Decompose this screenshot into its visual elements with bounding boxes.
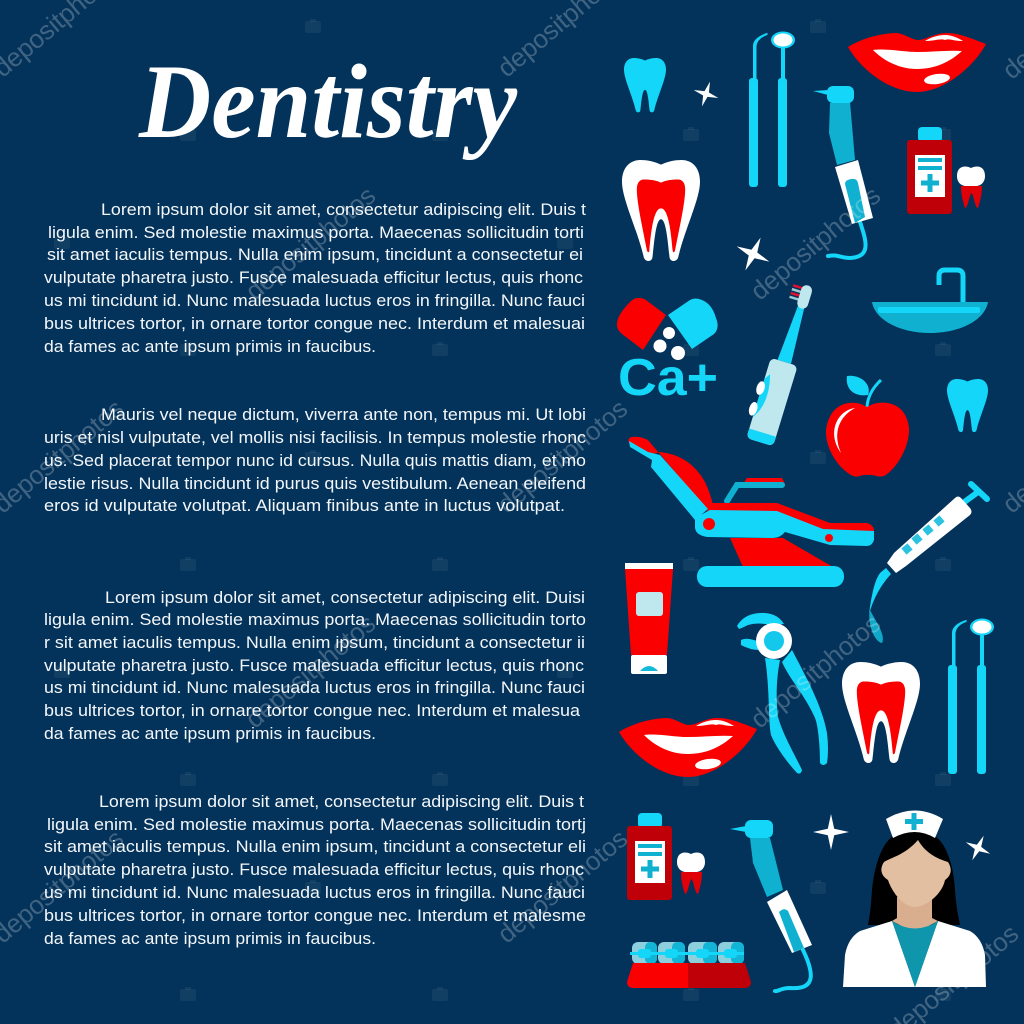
text block: paragraph 2: lestie risus. Nulla tincidunt id purus quis vestibulum. Aenean eleifend [44,474,586,493]
text block: paragraph 1: da fames ac ante ipsum primis in faucibus. [44,337,376,356]
text block: paragraph 3: Lorem ipsum dolor sit amet, consectetur adipiscing elit. Duisi [105,588,585,607]
icon: extraction forceps [737,613,828,774]
text block: paragraph 1: bus ultrices tortor, in ornare tortor congue nec. Interdum et malesuai [44,314,585,333]
icon: sparkle 1 [690,78,722,110]
watermark text: depositphotos [239,608,381,734]
icon: red lips top [848,33,986,92]
icon: large tooth with pulp top [622,160,700,261]
icon: calcium capsule [617,298,718,360]
text block: paragraph 1: vulputate pharetra justo. Fusce malesuada efficitur lectus, quis rhonc [44,268,584,287]
icon: small cyan tooth right [947,379,988,432]
icon: mouthwash bottle with tooth top [907,127,985,214]
text block: paragraph 3: bus ultrices tortor, in ornare tortor congue nec. Interdum et malesua [44,701,581,720]
watermark text: depositphotos [491,393,633,519]
text block: paragraph 4 [44,792,586,948]
text block: paragraph 4: us mi tincidunt id. Nunc malesuada luctus eros in fringilla. Nunc fauci [44,883,585,902]
text block: paragraph 2: eros id vulputate volutpat. Aliquam finibus ante in luctus volutpat. [44,496,565,515]
title: Dentistry [138,43,518,160]
text block: paragraph 3: r sit amet iaculis tempus. Nulla enim ipsum, tincidunt a consectetur ii [44,633,585,652]
icon: handpiece lower [730,820,812,991]
text block: paragraph 4: Lorem ipsum dolor sit amet, consectetur adipiscing elit. Duis t [99,792,584,811]
icon: syringe [869,484,987,643]
text block: paragraph 3: da fames ac ante ipsum primis in faucibus. [44,724,376,743]
text block: paragraph 1: sit amet iaculis tempus. Nulla enim ipsum, tincidunt a consectetur ei [47,245,583,264]
icon: small cyan tooth top [624,58,666,112]
watermark text: depositphotos [744,180,886,306]
text block: paragraph 4: ligula enim. Sed molestie maximus porta. Maecenas sollicitudin tortj [47,815,586,834]
icon: red lips lower [619,718,757,777]
icon: sparkle 3 [813,814,849,850]
text block: paragraph 1: us mi tincidunt id. Nunc malesuada luctus eros in fringilla. Nunc fauci [44,291,585,310]
text block: paragraph 2: Mauris vel neque dictum, viverra ante non, tempus mi. Ut lobi [101,405,586,424]
icon: braces on teeth [627,942,751,988]
icon: mouthwash bottle with tooth lower [627,813,705,900]
icon: dental probe and mirror top [749,32,795,187]
icon: electric toothbrush [741,279,821,446]
watermark text: depositphotos [239,180,381,306]
text block: paragraph 3 [44,588,586,743]
icon: apple [826,376,909,477]
icon: dental probe and mirror lower [948,618,994,774]
icon: handpiece top [813,86,873,258]
icon: large tooth with pulp middle [842,662,920,763]
icon: nurse [843,810,986,987]
icon: sink [872,270,988,333]
text block: paragraph 1: ligula enim. Sed molestie maximus porta. Maecenas sollicitudin torti [48,223,584,242]
text block: paragraph 2: us. Sed placerat tempor nunc id cursus. Nulla quis mattis diam, et mo [44,451,586,470]
text block: paragraph 2: uris et nisl vulputate, vel mollis nisi facilisis. In tempus molestie rhonc [44,428,587,447]
text block: paragraph 3: ligula enim. Sed molestie maximus porta. Maecenas sollicitudin torto [44,610,586,629]
text block: paragraph 4: bus ultrices tortor, in ornare tortor congue nec. Interdum et malesme [44,906,586,925]
icon: sparkle 4 [960,830,996,866]
text block: paragraph 1: Lorem ipsum dolor sit amet, consectetur adipiscing elit. Duis t [101,200,586,219]
text block: paragraph 3: vulputate pharetra justo. Fusce malesuada efficitur lectus, quis rhonc [44,656,585,675]
text block: paragraph 4: da fames ac ante ipsum primis in faucibus. [44,929,376,948]
text block: paragraph 1 [44,200,586,356]
text block: paragraph 3: us mi tincidunt id. Nunc malesuada luctus eros in fringilla. Nunc fauci [44,678,585,697]
icon: toothpaste tube [625,563,673,674]
text block: paragraph 2 [44,405,587,515]
icon: sparkle 2 [729,230,777,278]
watermark text: depositphotos [491,823,633,949]
icon: dental chair [628,437,874,587]
text: Ca+: Ca+ [618,349,718,407]
text block: paragraph 4: sit amet iaculis tempus. Nulla enim ipsum, tincidunt a consectetur eli [44,837,586,856]
text block: paragraph 4: vulputate pharetra justo. Fusce malesuada efficitur lectus, quis rhonc [44,860,585,879]
watermark text: depositphotos [744,608,886,734]
